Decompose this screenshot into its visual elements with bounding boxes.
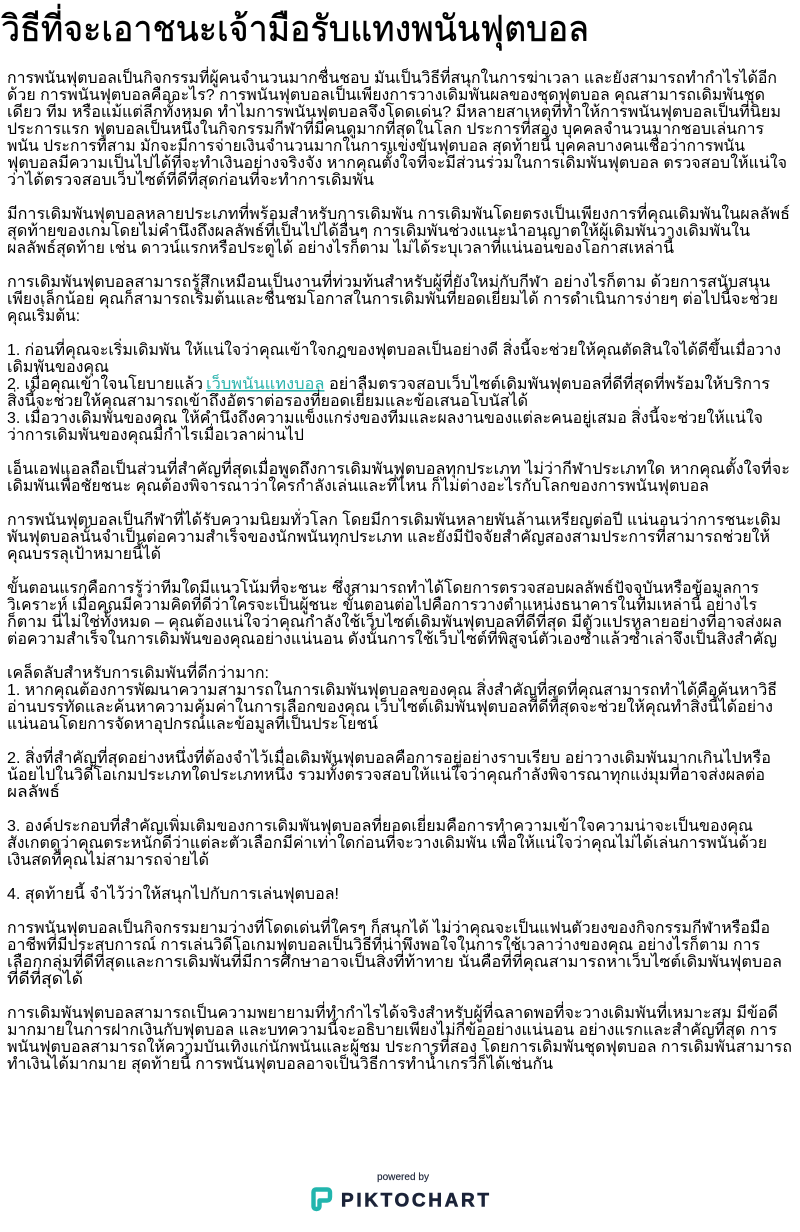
paragraph: leisure activity: อาชีพที่มีประสบการณ์ การเล่นวิดีโอเกมฟุตบอลเป็นวิธีที่น่าพึงพอใจในการใช้เวลาว่างของคุณ อย่างไรก็ตาม การ — [7, 933, 760, 955]
tips list: item 1: เคล็ดลับสำหรับการเดิมพันที่ดีกว่ามาก: — [7, 661, 269, 682]
paragraph: getting started: เพียงเล็กน้อย คุณก็สามารถเริ่มต้นและชื่นชมโอกาสในการเดิมพันที่ยอดเยี่ยมได้ การดำเนินการง่ายๆ ต่อไปนี้จะช่วย — [7, 287, 778, 309]
tips list: item 3: เงินสดที่คุณไม่สามารถจ่ายได้ — [7, 848, 209, 870]
paragraph: conclusion: การเดิมพันฟุตบอลสามารถเป็นความพยายามที่ทำกำไรได้จริงสำหรับผู้ที่ฉลาดพอที่จะวางเดิมพันที่เหมาะสม มีข้อดี — [7, 1001, 778, 1023]
paragraph: first step: ก็ตาม นี่ไม่ใช่ทั้งหมด – คุณต้องแน่ใจว่าคุณกำลังใช้เว็บไซต์เดิมพันฟุตบอลที่ดีที่สุด มีตัวแปรหลายอย่างที่อาจส่งผล — [7, 610, 782, 632]
paragraph: NFL: เดิมพันเพื่อชัยชนะ คุณต้องพิจารณาว่าใครกำลังเล่นและที่ไหน ก็ไม่ต่างอะไรกับโลกของการพนันฟุตบอล — [7, 474, 709, 496]
paragraph: introduction: ประการแรก ฟุตบอลเป็นหนึ่งในกิจกรรมกีฬาที่มีคนดูมากที่สุดในโลก ประการที่สอง บุคคลจำนวนมากชอบเล่นการ — [7, 117, 764, 139]
tips list: item 1: อ่านบรรทัดและค้นหาความคุ้มค่าในการเลือกของคุณ เว็บไซต์เดิมพันฟุตบอลที่ดีที่สุดจะช่วยให้คุณทำสิ่งนี้ได้อย่าง — [7, 695, 773, 717]
numbered list: first steps: 3. เมื่อวางเดิมพันของคุณ ให้คำนึงถึงความแข็งแกร่งของทีมและผลงานของแต่ละคนอยู่เสมอ สิ่งนี้จะช่วยให้แน่ใจ — [7, 406, 763, 428]
paragraph: bet types — [7, 202, 790, 258]
paragraph: conclusion: ทำเงินได้มากมาย สุดท้ายนี้ การพนันฟุตบอลอาจเป็นวิธีการทำน้ำเกรวี่ก็ได้เช่นกัน — [7, 1052, 553, 1074]
paragraph: leisure activity: เลือกกลุ่มที่ดีที่สุดและการเดิมพันที่มีการศึกษาอาจเป็นสิ่งที่ท้าทาย นั่นคือที่ที่คุณสามารถหาเว็บไซต์เดิมพันฟุตบอล — [7, 950, 782, 972]
paragraph: bet types: สุดท้ายของเกมโดยไม่คำนึงถึงผลลัพธ์ที่เป็นไปได้อื่นๆ การเดิมพันช่วงแนะนำอนุญาตให้ผู้เดิมพันวางเดิมพันใน — [7, 219, 750, 241]
wordmark: PIKTOCHART — [341, 1190, 489, 1212]
paragraph: NFL — [7, 457, 790, 496]
paragraph: introduction: ว่าได้ตรวจสอบเว็บไซต์ที่ดีที่สุดก่อนที่จะทำการเดิมพัน — [7, 168, 374, 190]
numbered list: first steps: อย่าลืมตรวจสอบเว็บไซต์เดิมพันฟุตบอลที่ดีที่สุดที่พร้อมให้บริการ — [329, 372, 770, 394]
paragraph: introduction: ฟุตบอลมีความเป็นไปได้ที่จะทำเงินอย่างจริงจัง หากคุณตั้งใจที่จะมีส่วนร่วมในการเดิมพันฟุตบอล ตรวจสอบให้แน่ใจ — [7, 151, 787, 173]
paragraph: conclusion: พนันฟุตบอลสามารถให้ความบันเทิงแก่นักพนันและผู้ชม ประการที่สอง โดยการเดิมพันชุดฟุตบอล การเดิมพันสามารถ — [7, 1035, 792, 1057]
tips list: item 4: 4. สุดท้ายนี้ จำไว้ว่าให้สนุกไปกับการเล่นฟุตบอล! — [7, 882, 339, 904]
paragraph: popularity: คุณบรรลุเป้าหมายนี้ได้ — [7, 542, 161, 564]
paragraph: popularity — [7, 508, 781, 564]
numbered list: first steps: ว่าการเดิมพันของคุณมีกำไรเมื่อเวลาผ่านไป — [7, 423, 304, 445]
paragraph: getting started: คุณเริ่มต้น: — [7, 304, 80, 326]
paragraph: popularity: การพนันฟุตบอลเป็นกีฬาที่ได้รับความนิยมทั่วโลก โดยมีการเดิมพันหลายพันล้านเหรียญต่อปี แน่นอนว่าการชนะเดิม — [7, 508, 781, 530]
icon: Piktochart mark — [314, 1190, 330, 1209]
paragraph: introduction: ด้วย การพนันฟุตบอลคืออะไร? การพนันฟุตบอลเป็นเพียงการวางเดิมพันผลของชุดฟุตบอล คุณสามารถเดิมพันชุด — [7, 84, 765, 105]
paragraph: getting started: การเดิมพันฟุตบอลสามารถรู้สึกเหมือนเป็นงานที่ท่วมท้นสำหรับผู้ที่ยังใหม่กับกีฬา อย่างไรก็ตาม ด้วยการสนับสนุน — [7, 270, 770, 292]
footer: powered by Piktochart logo — [314, 1172, 489, 1212]
tips list: item 3: สังเกตดูว่าคุณตระหนักดีว่าแต่ละตัวเลือกมีค่าเท่าใดก่อนที่จะวางเดิมพัน เพื่อให้แน่ใจว่าคุณไม่ได้เล่นการพนันด้วย — [7, 831, 767, 853]
tips list: item 1: แน่นอนโดยการจัดหาอุปกรณ์และข้อมูลที่เป็นประโยชน์ — [7, 712, 378, 734]
tips list: item 3: 3. องค์ประกอบที่สำคัญเพิ่มเติมของการเดิมพันฟุตบอลที่ยอดเยี่ยมคือการทำความเข้าใจความน่าจะเป็นของคุณ — [7, 814, 753, 836]
paragraph: leisure activity: ที่ดีที่สุดได้ — [7, 967, 83, 989]
paragraph: bet types: มีการเดิมพันฟุตบอลหลายประเภทที่พร้อมสำหรับการเดิมพัน การเดิมพันโดยตรงเป็นเพียงการที่คุณเดิมพันในผลลัพธ์ — [7, 202, 790, 224]
tips list: item 2: น้อยไปในวิดีโอเกมประเภทใดประเภทหนึ่ง รวมทั้งตรวจสอบให้แน่ใจว่าคุณกำลังพิจารณาทุกแง่มุมที่อาจส่งผลต่อ — [7, 763, 765, 785]
paragraph: NFL: เอ็นเอฟแอลถือเป็นส่วนที่สำคัญที่สุดเมื่อพูดถึงการเดิมพันฟุตบอลทุกประเภท ไม่ว่ากีฬาประเภทใด หากคุณตั้งใจที่จะ — [7, 457, 790, 479]
numbered list: first steps — [7, 338, 781, 445]
powered by label: powered by — [377, 1172, 429, 1183]
tips list: item 1: 1. หากคุณต้องการพัฒนาความสามารถในการเดิมพันฟุตบอลของคุณ สิ่งสำคัญที่สุดที่คุณสามารถทำได้คือค้นหาวิธี — [7, 678, 777, 700]
tips list: item 1 — [7, 661, 777, 734]
numbered list: first steps: 2. เมื่อคุณเข้าใจนโยบายแล้ว — [7, 372, 203, 394]
numbered list: first steps: 1. ก่อนที่คุณจะเริ่มเดิมพัน ให้แน่ใจว่าคุณเข้าใจกฎของฟุตบอลเป็นอย่างดี สิ่งนี้จะช่วยให้คุณตัดสินใจได้ดีขึ้นเมื่อวาง — [7, 338, 781, 360]
paragraph: leisure activity — [7, 916, 782, 989]
link: เว็บพนันแทงบอล — [206, 373, 324, 393]
paragraph: introduction: การพนันฟุตบอลเป็นกิจกรรมที่ผู้คนจำนวนมากชื่นชอบ มันเป็นวิธีที่สนุกในการฆ่าเวลา และยังสามารถทำกำไรได้อีก — [7, 66, 777, 88]
tips list: item 2 — [7, 746, 771, 801]
numbered list: first steps: สิ่งนี้จะช่วยให้คุณสามารถเข้าถึงอัตราต่อรองที่ยอดเยี่ยมและข้อเสนอโบนัสได้ — [7, 389, 528, 411]
tips list: item 2: ผลลัพธ์ — [7, 782, 60, 801]
paragraph: first step: ขั้นตอนแรกคือการรู้ว่าทีมใดมีแนวโน้มที่จะชนะ ซึ่งสามารถทำได้โดยการตรวจสอบผลลัพธ์ปัจจุบันหรือข้อมูลการ — [7, 576, 759, 598]
title: วิธีที่จะเอาชนะเจ้ามือรับแทงพนันฟุตบอล — [1, 4, 589, 51]
paragraph: first step — [7, 576, 782, 649]
paragraph: first step: วิเคราะห์ เมื่อคุณมีความคิดที่ดีว่าใครจะเป็นผู้ชนะ ขั้นตอนต่อไปคือการวางตำแหน่งธนาคารในทีมเหล่านี้ อย่างไร — [7, 593, 757, 615]
tips list: item 3 — [7, 814, 767, 870]
paragraph: introduction: พนัน ประการที่สาม มักจะมีการจ่ายเงินจำนวนมากในการแข่งขันฟุตบอล สุดท้ายนี้ บุคคลบางคนเชื่อว่าการพนัน — [7, 134, 745, 156]
numbered list: first steps: เดิมพันของคุณ — [7, 359, 109, 377]
paragraph: introduction — [7, 66, 787, 190]
paragraph: conclusion — [7, 1001, 792, 1074]
paragraph: popularity: พันฟุตบอลนั้นจำเป็นต่อความสำเร็จของนักพนันทุกประเภท และยังมีปัจจัยสำคัญสองสามประการที่สามารถช่วยให้ — [7, 525, 770, 547]
paragraph: leisure activity: การพนันฟุตบอลเป็นกิจกรรมยามว่างที่โดดเด่นที่ใครๆ ก็สนุกได้ ไม่ว่าคุณจะเป็นแฟนตัวยงของกิจกรรมกีฬาหรือมือ — [7, 916, 770, 938]
tips list: item 2: 2. สิ่งที่สำคัญที่สุดอย่างหนึ่งที่ต้องจำไว้เมื่อเดิมพันฟุตบอลคือการอยู่อย่างราบเรียบ อย่าวางเดิมพันมากเกินไปหรือ — [7, 746, 771, 768]
paragraph: bet types: ผลลัพธ์สุดท้าย เช่น ดาวน์แรกหรือประตูได้ อย่างไรก็ตาม ไม่ได้ระบุเวลาที่แน่นอนของโอกาสเหล่านี้ — [7, 236, 674, 258]
paragraph: getting started — [7, 270, 778, 326]
paragraph: first step: ต่อความสำเร็จในการเดิมพันของคุณอย่างแน่นอน ดังนั้นการใช้เว็บไซต์ที่พิสูจน์ตัวเองซ้ำแล้วซ้ำเล่าจึงเป็นสิ่งสำคัญ — [7, 627, 777, 649]
paragraph: conclusion: มากมายในการฝากเงินกับฟุตบอล และบทความนี้จะอธิบายเพียงไม่กี่ข้ออย่างแน่นอน อย่างแรกและสำคัญที่สุด การ — [7, 1018, 777, 1040]
paragraph: introduction: เดียว ทีม หรือแม้แต่ลีกทั้งหมด ทำไมการพนันฟุตบอลจึงโดดเด่น? มีหลายสาเหตุที่ทำให้การพนันฟุตบอลเป็นที่นิยม — [7, 100, 781, 122]
